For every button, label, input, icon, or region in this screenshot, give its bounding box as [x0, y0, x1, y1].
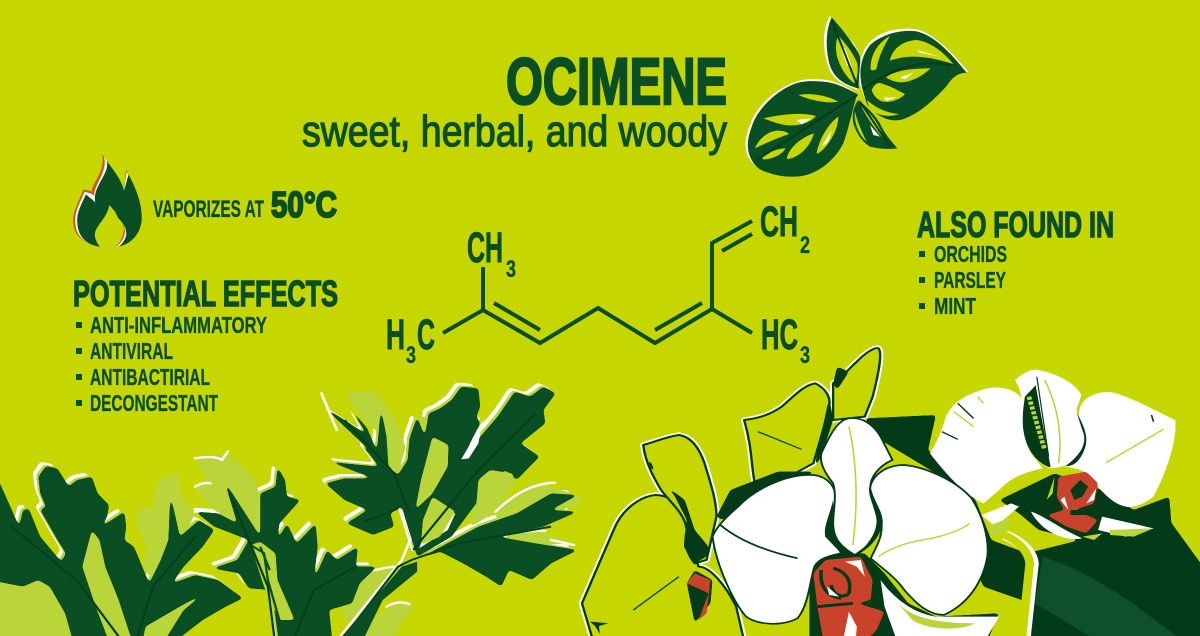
white outline layer	[0, 382, 573, 636]
list: potential effects: ANTIVIRAL	[90, 338, 173, 364]
white rims	[195, 393, 574, 607]
list: also found in: MINT	[934, 293, 976, 319]
chart: ocimene molecular structure: H	[386, 311, 405, 359]
vaporizes at label: 50°C	[271, 184, 337, 225]
list: also found in	[919, 241, 1007, 319]
chart: ocimene molecular structure: C	[417, 311, 435, 359]
light patches on leaves	[0, 437, 515, 636]
chart: ocimene molecular structure: 2	[800, 232, 810, 259]
front flower lip	[813, 557, 885, 636]
front flower lower petal	[881, 580, 999, 636]
back petals outline	[582, 348, 880, 636]
light leaves behind	[136, 390, 582, 636]
icon: basil leaves	[746, 16, 968, 177]
light green offset layer	[0, 385, 576, 636]
subtitle: sweet, herbal, and woody	[302, 107, 727, 156]
chart: ocimene molecular structure: CH	[467, 224, 503, 272]
chart: ocimene molecular structure	[386, 198, 810, 369]
illustration: orchids	[582, 348, 1200, 636]
back petals	[582, 348, 880, 636]
illustration: parsley	[0, 382, 582, 636]
list: potential effects: ANTI-INFLAMMATORY	[90, 312, 267, 338]
vaporizes at label: VAPORIZES AT	[153, 196, 264, 223]
leaf notches	[461, 419, 483, 459]
list: also found in: PARSLEY	[934, 267, 1006, 293]
front flower petals	[712, 418, 988, 624]
chart: ocimene molecular structure: CH	[760, 198, 798, 246]
chart: ocimene molecular structure: 3	[506, 256, 516, 283]
list: also found in: ORCHIDS	[934, 241, 1007, 267]
title: OCIMENE	[506, 44, 727, 118]
list: potential effects: ANTIBACTIRIAL	[90, 364, 210, 390]
list: potential effects	[76, 312, 267, 416]
dark petal shading	[647, 367, 1200, 636]
chart: ocimene molecular structure: 3	[406, 342, 416, 369]
dark stems	[11, 413, 551, 636]
chart: ocimene molecular structure: 3	[800, 342, 810, 369]
right flower petals	[930, 370, 1176, 507]
dark leaves front	[0, 387, 578, 636]
flower stem	[1005, 535, 1033, 636]
leaf	[1035, 557, 1177, 636]
heading: also found in: ALSO FOUND IN	[917, 204, 1114, 245]
list: potential effects: DECONGESTANT	[90, 390, 218, 416]
icon: flame	[73, 154, 142, 247]
right flower lip	[1031, 472, 1153, 540]
vaporizes at label	[153, 184, 337, 225]
heading: potential effects: POTENTIAL EFFECTS	[73, 273, 338, 314]
chart: ocimene molecular structure: HC	[761, 311, 798, 359]
